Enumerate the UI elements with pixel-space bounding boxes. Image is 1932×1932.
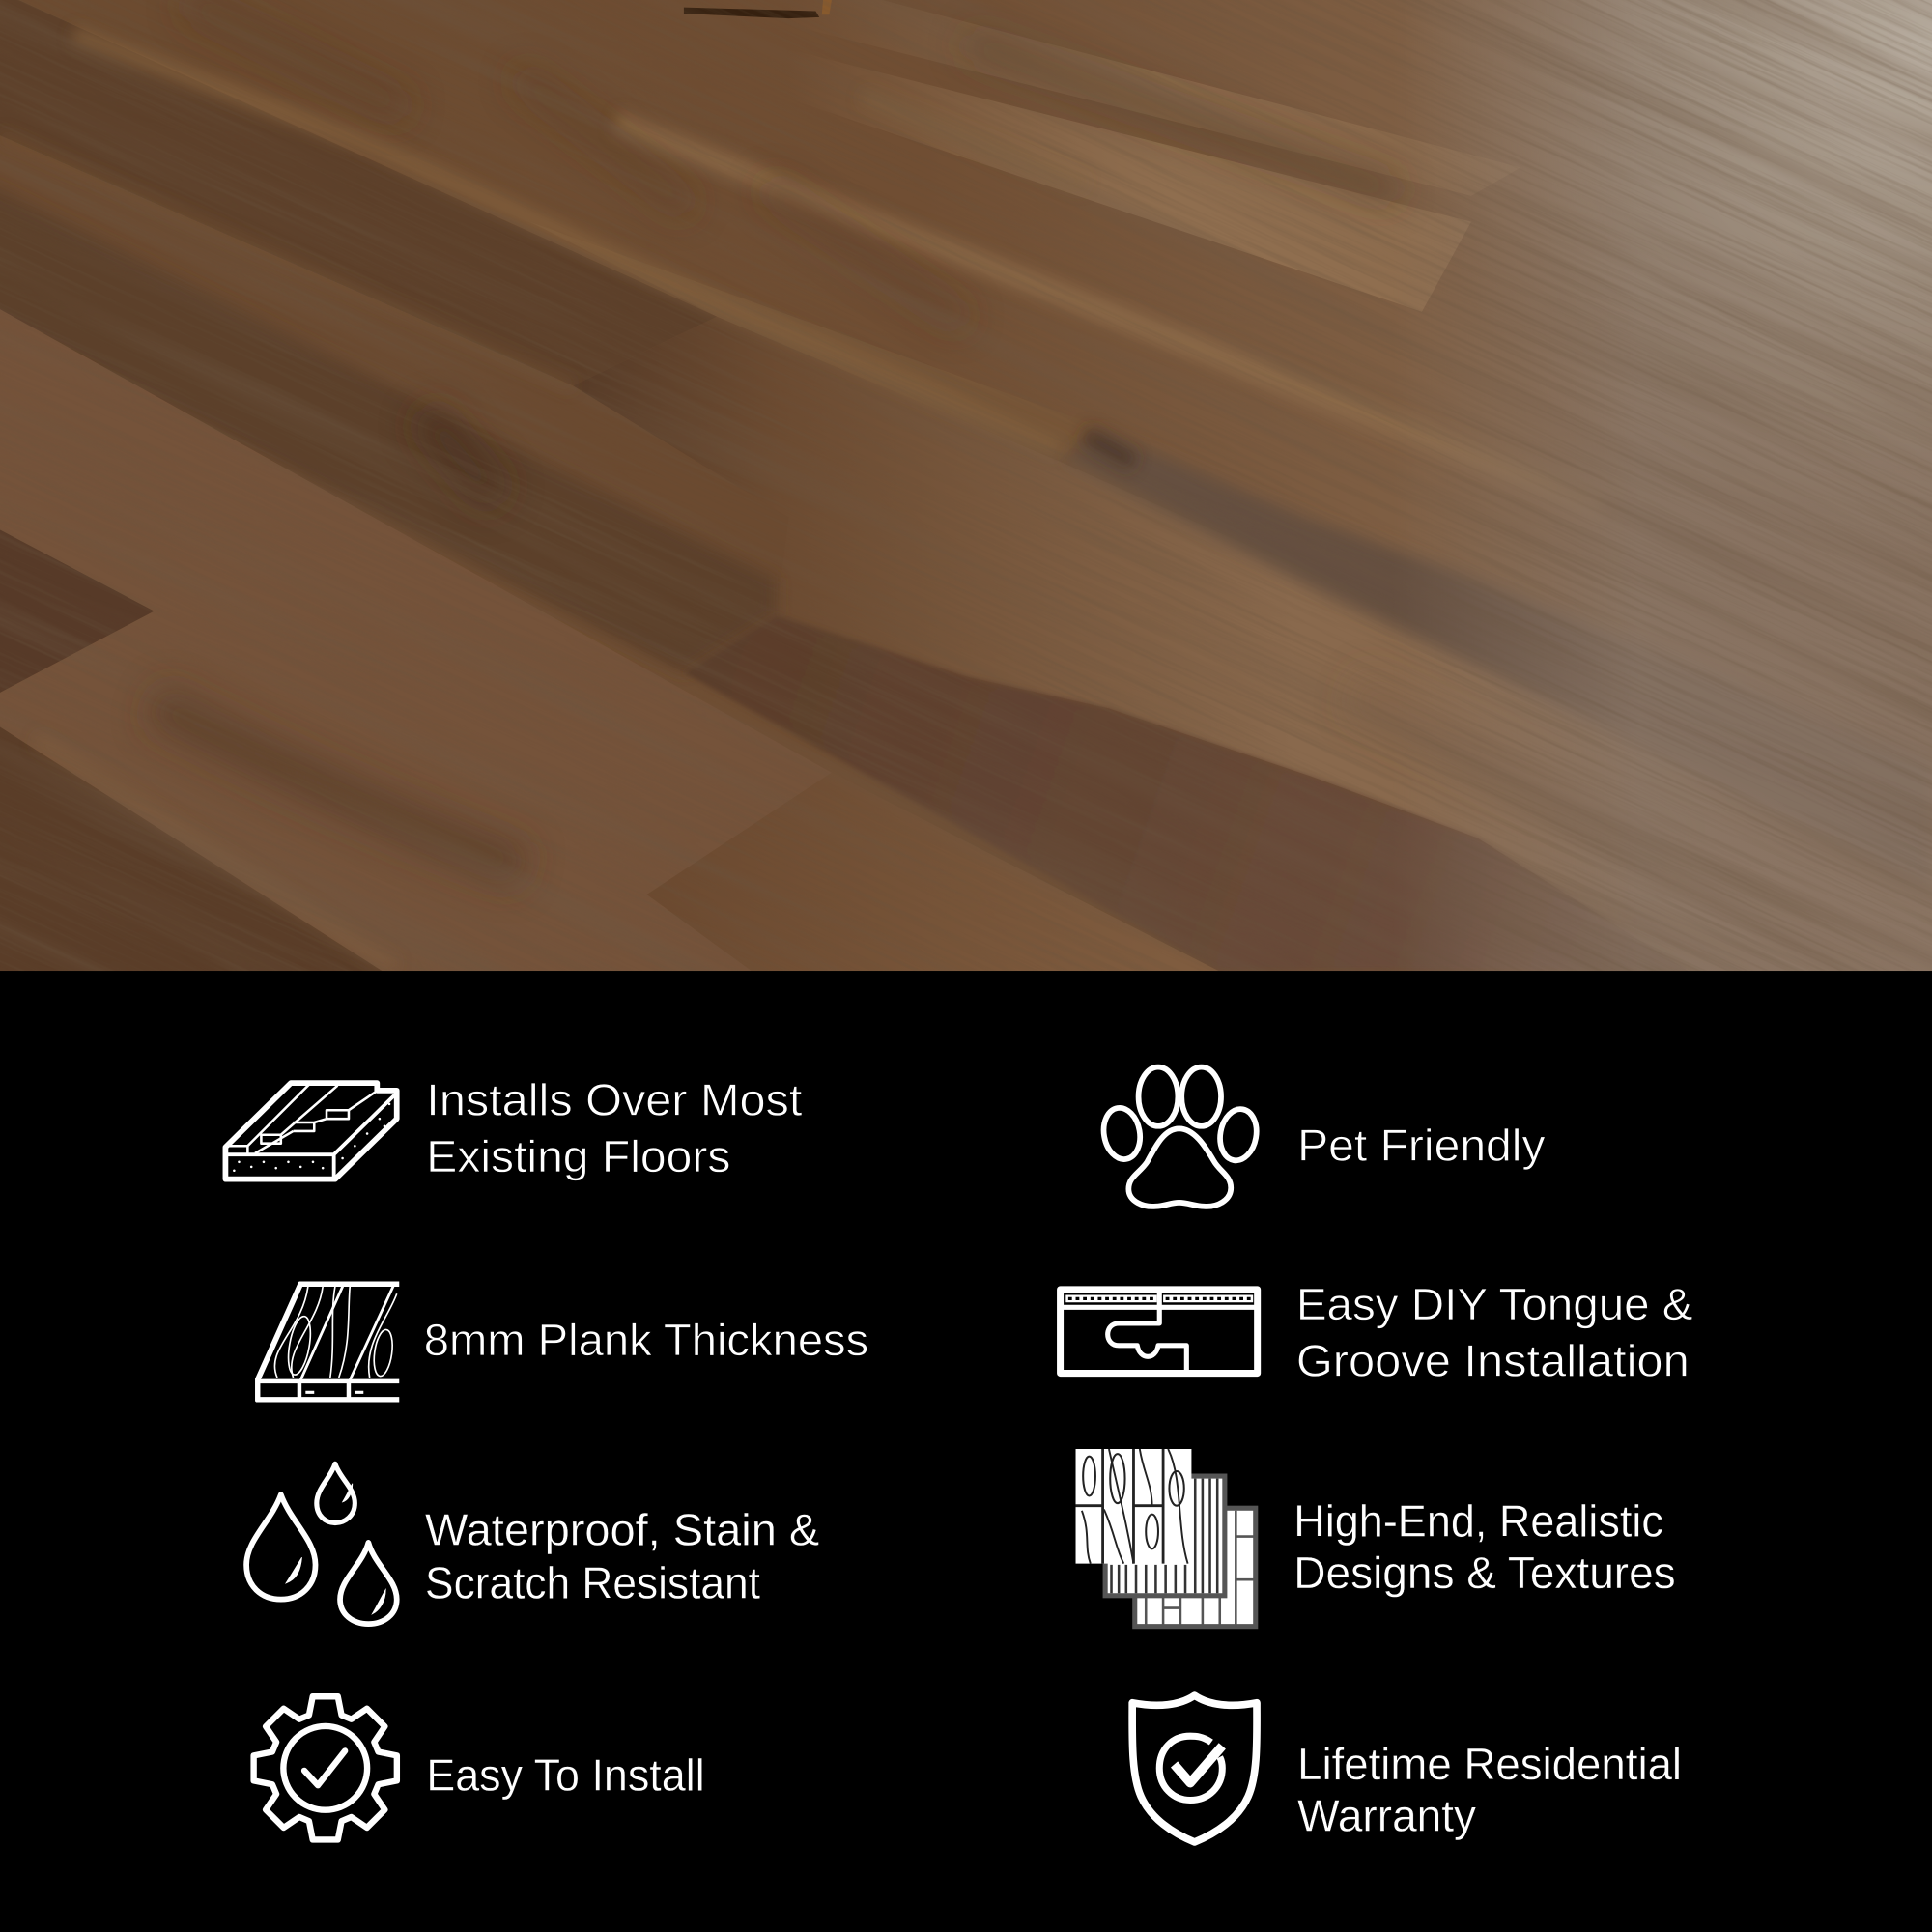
icon: paw print	[1099, 1067, 1261, 1207]
light glare on floor	[0, 0, 1932, 971]
label: Installs Over Most	[426, 1074, 803, 1124]
icon: tongue and groove profile	[1061, 1289, 1258, 1374]
icon: shield with check	[1132, 1695, 1257, 1842]
feature: pet friendly	[1099, 1067, 1546, 1207]
wood grain streaks	[0, 35, 1602, 967]
black features panel	[0, 971, 1932, 1932]
label: Easy To Install	[426, 1749, 705, 1800]
label: Existing Floors	[426, 1131, 730, 1181]
label	[1296, 1279, 1693, 1386]
feature: waterproof, stain and scratch resistant	[246, 1463, 819, 1624]
label: Waterproof, Stain &	[425, 1504, 819, 1554]
label	[425, 1504, 819, 1607]
feature: easy DIY tongue and groove installation	[1061, 1279, 1693, 1386]
feature: installs over most existing floors	[225, 1074, 803, 1181]
feature: high-end, realistic designs and textures	[1076, 1449, 1676, 1627]
label	[426, 1074, 803, 1181]
icon: stacked texture swatches	[1076, 1449, 1256, 1627]
label: 8mm Plank Thickness	[424, 1315, 868, 1365]
label	[1293, 1496, 1676, 1598]
label: Pet Friendly	[1297, 1121, 1546, 1171]
chair leg at top edge	[684, 0, 832, 18]
soft dark plank with knot	[1065, 431, 1932, 887]
label: Warranty	[1297, 1790, 1476, 1840]
icon: gear with check	[254, 1696, 397, 1839]
label: High-End, Realistic	[1293, 1496, 1663, 1547]
feature: 8mm plank thickness	[258, 1284, 868, 1400]
label	[1297, 1739, 1682, 1840]
label: Designs & Textures	[1293, 1548, 1676, 1598]
broad dark figure in the grain	[154, 0, 1663, 868]
photo: wood plank floor	[0, 0, 1932, 971]
icon: floor layers	[225, 1083, 397, 1179]
label: Lifetime Residential	[1297, 1739, 1682, 1789]
label: Groove Installation	[1296, 1336, 1690, 1386]
icon: water drops	[246, 1463, 397, 1624]
label: Easy DIY Tongue &	[1296, 1279, 1693, 1329]
icon: wood plank	[258, 1284, 401, 1400]
label: Scratch Resistant	[425, 1557, 760, 1607]
feature: lifetime residential warranty	[1132, 1695, 1682, 1842]
feature: easy to install	[254, 1696, 705, 1839]
